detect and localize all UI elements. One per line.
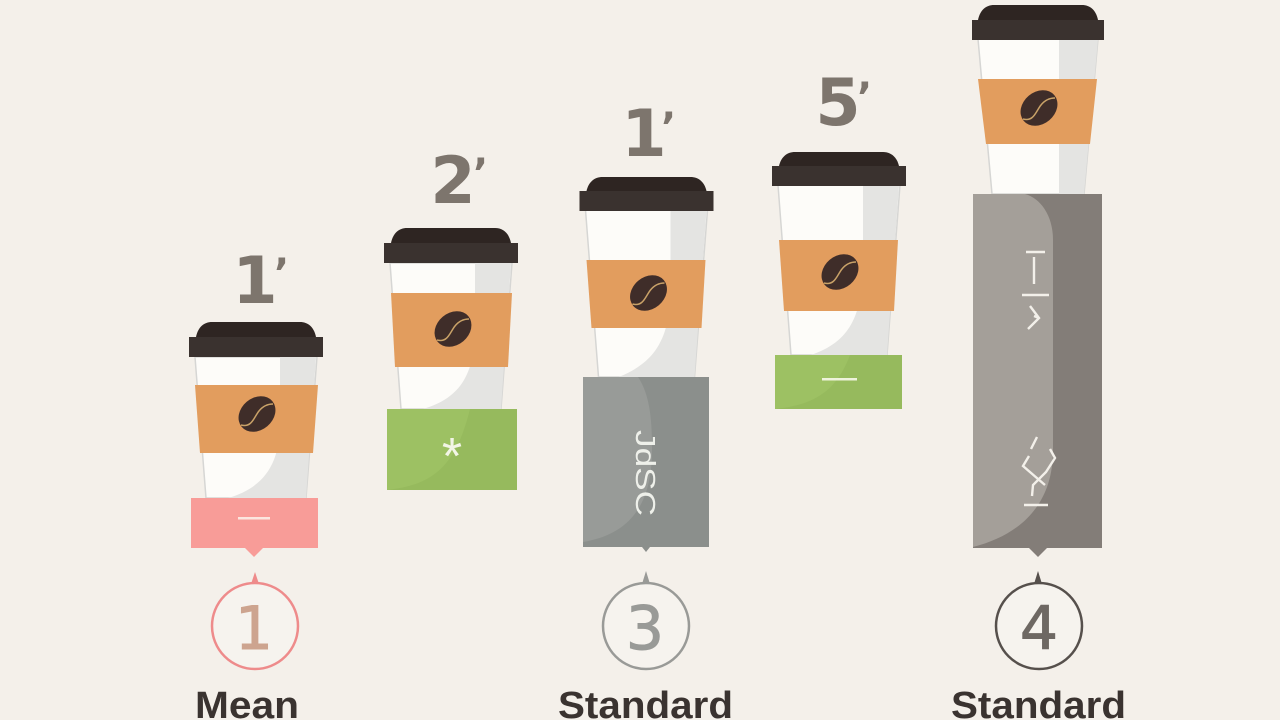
bar 1: pink (191, 498, 318, 557)
value label: cup 2: ’ (473, 151, 488, 197)
bar 2: green (387, 409, 517, 490)
bar 3: grey (583, 377, 709, 552)
bar 2: green: * (442, 428, 462, 486)
step badge 3 (603, 571, 689, 669)
icon: coffee cup 2 (384, 228, 518, 409)
icon: coffee cup 1 (189, 322, 323, 498)
step badge 1: 1 (235, 594, 273, 664)
step badge 4: 4 (1020, 594, 1058, 664)
icon: coffee cup 3 (580, 177, 714, 377)
value label: cup 2: 2 (430, 144, 476, 219)
value label: cup 3: ’ (661, 105, 676, 151)
bar 5: tall dark grey (973, 194, 1102, 557)
value label: cup 3: 1 (621, 97, 667, 172)
bar 3: grey: JdSC (630, 430, 661, 516)
value label: cup 4: 5 (815, 66, 861, 141)
value label: cup 1: ’ (274, 251, 289, 297)
step badge 3: 3 (626, 594, 664, 664)
step badge 1 (212, 572, 298, 669)
step badge 4 (996, 571, 1082, 669)
icon: coffee cup 4 (772, 152, 906, 355)
bar 4: green (775, 355, 902, 409)
value label: cup 4: ’ (857, 75, 872, 121)
icon: coffee cup 5 (972, 5, 1104, 194)
value label: cup 1: 1 (232, 244, 278, 319)
